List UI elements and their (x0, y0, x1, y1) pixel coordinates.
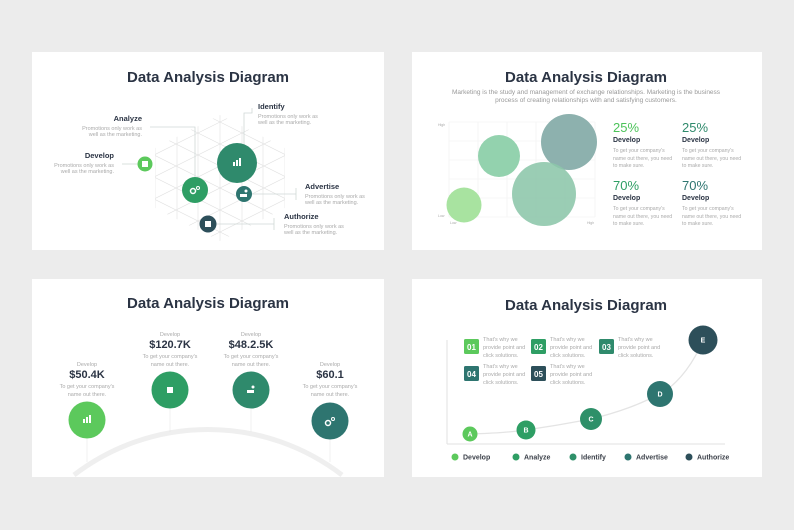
label: authorize (283, 212, 344, 236)
steps list: click solutions. (483, 380, 519, 386)
stat 4: to make sure. (682, 221, 713, 227)
label: identify: Promotions only work as (258, 114, 318, 120)
points: A (467, 432, 473, 438)
label: identify: Identify (258, 102, 285, 111)
stat 3 (613, 178, 672, 227)
label: analyze (82, 114, 142, 138)
icon: analyze gear circle (182, 177, 208, 203)
column 3: Develop (241, 332, 261, 338)
label: develop: Promotions only work as (54, 163, 114, 169)
stat 4: To get your company's (682, 206, 734, 212)
title: Data Analysis Diagram (127, 69, 289, 86)
column 4: Develop (320, 362, 340, 368)
steps list: 05 (534, 370, 543, 379)
column 1: Develop (77, 362, 97, 368)
subtitle: Marketing is the study and management of exchange relationships. Marketing is the business (452, 89, 721, 96)
icon: advertise circle (236, 186, 252, 202)
legend (452, 454, 729, 462)
steps list: That's why we (550, 364, 585, 370)
legend: Analyze (524, 454, 551, 462)
steps list: That's why we (618, 337, 653, 343)
stat 4 (682, 178, 741, 227)
legend: Authorize (697, 454, 729, 462)
bubbles (446, 114, 597, 226)
label: advertise: Promotions only work as (305, 194, 365, 200)
points: B (523, 428, 529, 434)
stat 2: To get your company's (682, 148, 734, 154)
points: E (701, 338, 706, 344)
steps list: provide point and (483, 345, 525, 351)
panel: bubble chart (412, 52, 762, 250)
stat 2 (682, 120, 741, 169)
label: analyze: Analyze (114, 114, 142, 123)
stat 1: To get your company's (613, 148, 665, 154)
label: authorize: Authorize (284, 212, 319, 221)
points: C (588, 416, 594, 424)
column 4 (303, 362, 358, 440)
title: Data Analysis Diagram (505, 69, 667, 86)
panel: bubble chart: Low (450, 221, 457, 225)
stat 4: 70% (682, 178, 708, 193)
icon: authorize circle (200, 216, 216, 232)
steps list: click solutions. (483, 353, 519, 359)
steps list: provide point and (618, 345, 660, 351)
points (462, 326, 718, 442)
label: advertise: Advertise (305, 182, 339, 191)
column 3: $48.2.5K (229, 339, 273, 351)
label: analyze: well as the marketing. (88, 132, 142, 138)
label: advertise (304, 182, 365, 206)
stat 2: name out there, you need (682, 156, 741, 162)
stat 1 (613, 120, 672, 169)
label: analyze: Promotions only work as (82, 126, 142, 132)
label: advertise: well as the marketing. (304, 200, 359, 206)
axes (447, 340, 725, 444)
subtitle (452, 89, 721, 104)
panel: bubble chart: Low (438, 214, 445, 218)
panel: bubble chart: High (438, 123, 445, 127)
stat 3: name out there, you need (613, 214, 672, 220)
title: Data Analysis Diagram (505, 297, 667, 314)
column 3: To get your company's (224, 354, 279, 360)
steps list: click solutions. (550, 353, 586, 359)
column 2: name out there. (151, 362, 190, 368)
steps list: That's why we (483, 364, 518, 370)
column 2: $120.7K (149, 339, 191, 351)
steps list: click solutions. (550, 380, 586, 386)
panel: growth curve (412, 279, 762, 477)
steps list: provide point and (550, 345, 592, 351)
steps list: click solutions. (618, 353, 654, 359)
column 1: To get your company's (60, 384, 115, 390)
steps list: 04 (467, 370, 476, 379)
stat 1: to make sure. (613, 163, 644, 169)
steps list: 01 (467, 343, 476, 352)
stat 1: name out there, you need (613, 156, 672, 162)
label: authorize: Promotions only work as (284, 224, 344, 230)
stat 4: Develop (682, 195, 709, 202)
stat 2: to make sure. (682, 163, 713, 169)
panel: isometric diagram (32, 52, 384, 267)
label: develop: Develop (85, 151, 114, 160)
column 2 (143, 332, 198, 408)
icon: identify circle (217, 143, 257, 183)
column 1: $50.4K (69, 369, 105, 381)
column 1: name out there. (68, 392, 107, 398)
column 2: Develop (160, 332, 180, 338)
column 3: name out there. (232, 362, 271, 368)
curve (470, 340, 703, 434)
steps list: provide point and (483, 372, 525, 378)
subtitle: process of creating relationships with and satisfying customers. (495, 97, 677, 104)
points: D (657, 392, 663, 398)
column 4: name out there. (311, 392, 350, 398)
column 3 (224, 332, 279, 408)
legend: Advertise (636, 454, 668, 462)
label: develop: well as the marketing. (60, 169, 114, 175)
steps list: That's why we (483, 337, 518, 343)
stat 4: name out there, you need (682, 214, 741, 220)
column 4: To get your company's (303, 384, 358, 390)
legend: Identify (581, 454, 606, 462)
steps list: provide point and (550, 372, 592, 378)
steps list: 02 (534, 343, 543, 352)
stat 3: to make sure. (613, 221, 644, 227)
stat 1: 25% (613, 120, 639, 135)
column 2: To get your company's (143, 354, 198, 360)
stat 3: To get your company's (613, 206, 665, 212)
label: authorize: well as the marketing. (283, 230, 338, 236)
stat 3: Develop (613, 195, 640, 202)
legend: Develop (463, 454, 490, 462)
panel: bubble chart: High (587, 221, 594, 225)
steps list: 03 (602, 343, 611, 352)
stat 2: 25% (682, 120, 708, 135)
panel: value arc (32, 279, 384, 477)
icon: develop circle (138, 156, 152, 172)
column 4: $60.1 (316, 369, 344, 381)
label: identify (257, 102, 318, 126)
title: Data Analysis Diagram (127, 295, 289, 312)
column 1 (60, 362, 115, 438)
label: develop (54, 151, 114, 175)
steps list: That's why we (550, 337, 585, 343)
stat 3: 70% (613, 178, 639, 193)
stat 2: Develop (682, 137, 709, 144)
label: identify: well as the marketing. (257, 120, 312, 126)
stat 1: Develop (613, 137, 640, 144)
steps list (464, 337, 660, 386)
